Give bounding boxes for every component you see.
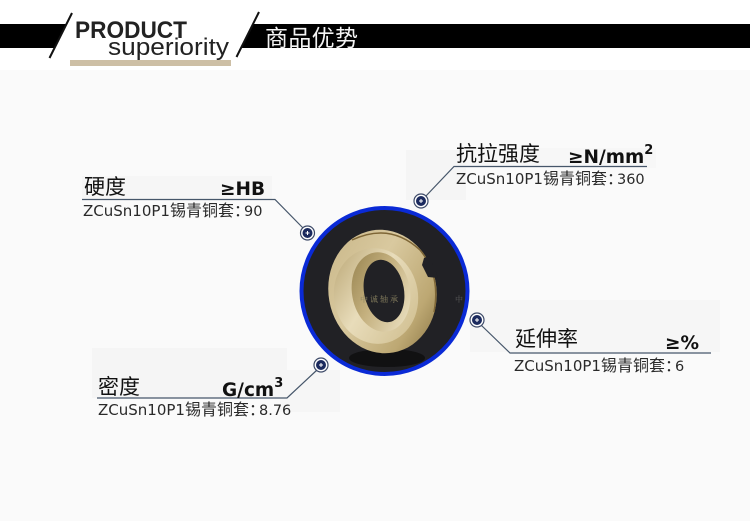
value: ZCuSn10P1锡青铜套：360	[456, 165, 645, 189]
callout: 密度	[97, 358, 328, 420]
unit: 3	[274, 376, 283, 391]
leader line	[481, 325, 711, 353]
ring inner taper	[345, 248, 417, 336]
slash: right	[236, 12, 259, 57]
ring bore	[359, 257, 409, 325]
value: ZCuSn10P1锡青铜套：90	[83, 197, 262, 221]
unit: 2	[644, 143, 653, 158]
ring groove	[352, 233, 436, 312]
value: ZCuSn10P1锡青铜套：8.76	[98, 396, 291, 420]
product photo circle	[302, 208, 468, 374]
ring shadow	[349, 349, 425, 367]
unit: ≥N/mm	[568, 147, 644, 168]
leader line	[97, 370, 317, 398]
marker	[314, 358, 328, 372]
leader line	[82, 200, 303, 228]
callout: 抗拉强度	[414, 143, 653, 208]
heading: superiority: superiority	[108, 34, 229, 61]
watermark right: 中	[455, 294, 463, 304]
marker	[470, 313, 484, 327]
callout: 延伸率	[470, 313, 711, 376]
title: 硬度	[84, 176, 126, 199]
watermark: 中诚轴承	[360, 294, 400, 304]
unit: G/cm	[222, 380, 274, 401]
blue circle frame	[302, 208, 468, 374]
unit: ≥%	[665, 333, 699, 354]
unit: ≥HB	[220, 179, 265, 200]
black band: left	[0, 24, 66, 48]
callout: 硬度	[82, 176, 314, 240]
value: ZCuSn10P1锡青铜套：6	[514, 352, 684, 376]
ring notch	[422, 256, 438, 278]
heading: PRODUCT: PRODUCT	[75, 17, 187, 44]
slash: left	[50, 13, 72, 58]
tan underline	[70, 60, 231, 66]
black band: right	[241, 24, 750, 48]
title: 延伸率	[515, 328, 578, 351]
marker	[414, 194, 428, 208]
icon: brass bearing ring	[319, 221, 446, 362]
title: 密度	[98, 376, 140, 399]
leader line	[425, 166, 647, 197]
marker	[300, 226, 314, 240]
ring front face	[326, 241, 426, 351]
header band	[0, 12, 750, 66]
heading: 商品优势: 商品优势	[265, 25, 358, 51]
title: 抗拉强度	[456, 143, 540, 166]
